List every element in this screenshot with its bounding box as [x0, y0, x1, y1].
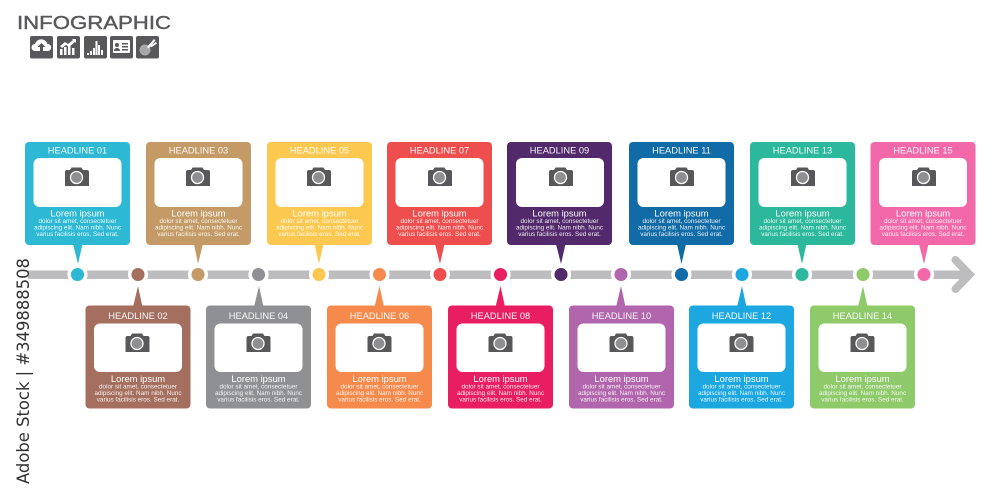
card 13: dolor sit amet, consectetuer — [764, 218, 841, 225]
card 05: dolor sit amet, consectetuer — [281, 218, 358, 225]
card 08 — [448, 286, 553, 408]
card 13: HEADLINE 13 — [773, 146, 832, 156]
card 15: varius facilisis eros. Sed erat. — [882, 231, 964, 238]
card 11: dolor sit amet, consectetuer — [643, 218, 720, 225]
timeline bar — [28, 260, 970, 289]
card 09: dolor sit amet, consectetuer — [521, 218, 598, 225]
card 02: dolor sit amet, consectetuer — [99, 384, 177, 390]
card 14: Lorem ipsum — [835, 373, 890, 384]
card 11: adipiscing elit. Nam nibh. Nunc — [638, 224, 725, 232]
icon row — [30, 36, 159, 58]
card 03: varius facilisis eros. Sed erat. — [157, 231, 240, 238]
card 14 — [810, 286, 915, 408]
card 01 — [25, 142, 130, 264]
card 07: Lorem ipsum — [412, 208, 467, 218]
card 10 — [569, 286, 674, 408]
card 05: HEADLINE 05 — [290, 146, 349, 156]
card 11: HEADLINE 11 — [652, 146, 711, 156]
card 08: dolor sit amet, consectetuer — [462, 384, 539, 390]
card 04: adipiscing elit. Nam nibh. Nunc — [215, 390, 302, 397]
card 06: varius facilisis eros. Sed erat. — [338, 396, 421, 404]
card 13: varius facilisis eros. Sed erat. — [761, 231, 844, 238]
card 02: HEADLINE 02 — [108, 311, 168, 321]
card 15: Lorem ipsum — [896, 208, 950, 218]
title: INFOGRAPHIC — [17, 12, 171, 33]
card 13: adipiscing elit. Nam nibh. Nunc — [759, 224, 846, 232]
card 09: varius facilisis eros. Sed erat. — [518, 231, 601, 238]
card 09: HEADLINE 09 — [530, 146, 589, 156]
card 12: varius facilisis eros. Sed erat. — [700, 396, 783, 404]
card 14: dolor sit amet, consectetuer — [824, 384, 901, 390]
card 09 — [507, 142, 612, 264]
card 09: adipiscing elit. Nam nibh. Nunc — [516, 224, 603, 232]
card 06: dolor sit amet, consectetuer — [341, 384, 418, 390]
card 01: HEADLINE 01 — [48, 146, 107, 156]
card 15: HEADLINE 15 — [893, 146, 953, 156]
timeline nodes — [69, 266, 932, 283]
card 12: Lorem ipsum — [714, 373, 769, 384]
card 11: Lorem ipsum — [654, 208, 709, 218]
card 01: Lorem ipsum — [50, 208, 105, 218]
card 03 — [146, 142, 251, 264]
card 10: Lorem ipsum — [594, 373, 649, 384]
card 10: varius facilisis eros. Sed erat. — [580, 396, 663, 404]
card 15: dolor sit amet, consectetuer — [884, 218, 962, 225]
card 07: dolor sit amet, consectetuer — [401, 218, 478, 225]
card 03: dolor sit amet, consectetuer — [160, 218, 237, 225]
card 11 — [629, 142, 734, 264]
card 12: adipiscing elit. Nam nibh. Nunc — [698, 390, 785, 397]
arrow head — [956, 260, 970, 289]
card 05: varius facilisis eros. Sed erat. — [278, 231, 361, 238]
card 11: varius facilisis eros. Sed erat. — [640, 231, 723, 238]
card 06: Lorem ipsum — [352, 373, 407, 384]
card 10: HEADLINE 10 — [592, 311, 651, 321]
card 12: HEADLINE 12 — [712, 311, 771, 321]
card 04 — [206, 286, 311, 408]
card 02 — [86, 286, 190, 408]
icon: bar histogram — [84, 36, 107, 58]
card 05 — [267, 142, 372, 264]
icon: cloud upload — [30, 36, 53, 58]
card 12 — [689, 286, 794, 408]
card 13 — [750, 142, 855, 264]
card 04: dolor sit amet, consectetuer — [220, 384, 297, 390]
card 06 — [327, 286, 432, 408]
card 01: adipiscing elit. Nam nibh. Nunc — [34, 224, 121, 232]
card 09: Lorem ipsum — [532, 208, 587, 218]
card 03: adipiscing elit. Nam nibh. Nunc — [155, 224, 242, 232]
card 06: adipiscing elit. Nam nibh. Nunc — [336, 390, 423, 397]
card 14: varius facilisis eros. Sed erat. — [821, 396, 904, 404]
card 15: adipiscing elit. Nam nibh. Nunc — [879, 224, 967, 232]
card 07: adipiscing elit. Nam nibh. Nunc — [396, 224, 483, 232]
card 02: Lorem ipsum — [111, 373, 165, 384]
card 03: HEADLINE 03 — [169, 146, 228, 156]
card 13: Lorem ipsum — [775, 208, 830, 218]
card 04: HEADLINE 04 — [229, 311, 288, 321]
card 08: HEADLINE 08 — [471, 311, 530, 321]
card 08: adipiscing elit. Nam nibh. Nunc — [457, 390, 544, 397]
card 14: HEADLINE 14 — [833, 311, 892, 321]
card 04: Lorem ipsum — [231, 373, 286, 384]
card 12: dolor sit amet, consectetuer — [703, 384, 780, 390]
icon: id card — [110, 36, 133, 58]
card 08: Lorem ipsum — [473, 373, 528, 384]
card 06: HEADLINE 06 — [350, 311, 409, 321]
card 03: Lorem ipsum — [171, 208, 226, 218]
icon: guitar pick — [136, 36, 159, 58]
icon: growth chart — [57, 36, 80, 58]
card 07: varius facilisis eros. Sed erat. — [398, 231, 481, 238]
card 02: adipiscing elit. Nam nibh. Nunc — [94, 390, 182, 397]
card 04: varius facilisis eros. Sed erat. — [217, 396, 300, 404]
card 14: adipiscing elit. Nam nibh. Nunc — [819, 390, 906, 397]
card 07 — [387, 142, 492, 264]
card 15 — [870, 142, 976, 264]
card 05: Lorem ipsum — [292, 208, 347, 218]
card 07: HEADLINE 07 — [410, 146, 469, 156]
card 02: varius facilisis eros. Sed erat. — [97, 396, 179, 404]
card 05: adipiscing elit. Nam nibh. Nunc — [276, 224, 363, 232]
watermark: vertical stock label: Adobe Stock | #349888508 — [14, 258, 33, 484]
card 08: varius facilisis eros. Sed erat. — [459, 396, 542, 404]
card 01: dolor sit amet, consectetuer — [39, 218, 116, 225]
card 10: adipiscing elit. Nam nibh. Nunc — [578, 390, 665, 397]
card 01: varius facilisis eros. Sed erat. — [36, 231, 119, 238]
card 10: dolor sit amet, consectetuer — [583, 384, 660, 390]
